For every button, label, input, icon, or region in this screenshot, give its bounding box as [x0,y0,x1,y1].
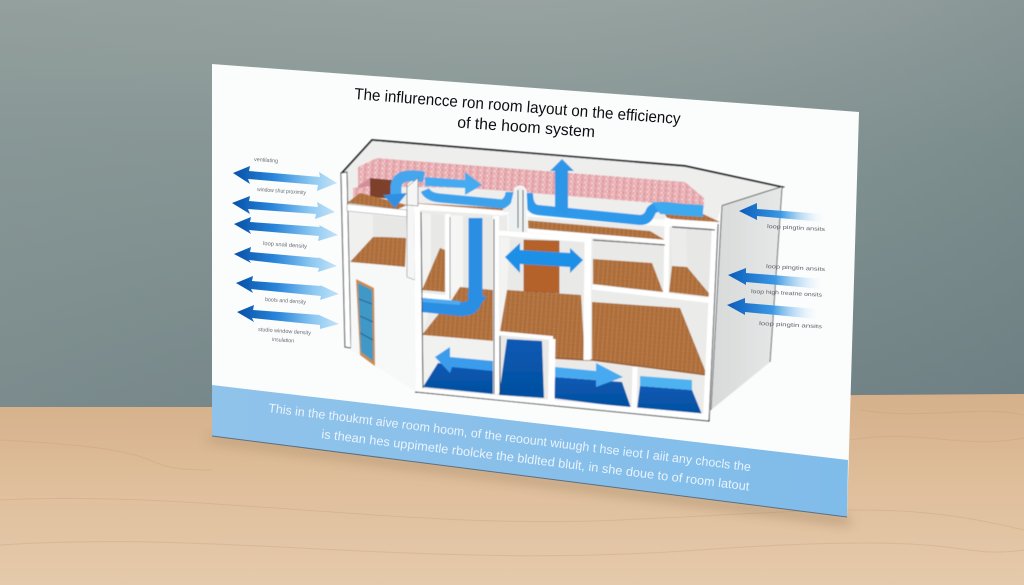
vertical duct with arrow [422,218,487,314]
card shadow [205,436,852,525]
room I lower [550,360,633,408]
left outer wall [341,172,351,348]
attic back wall [341,140,782,222]
room D blue corridor [499,333,551,400]
left arrow labels: studio window density [258,327,311,337]
room J lower [637,368,703,417]
dark wall outlines [415,212,718,421]
wall between left and middle [407,178,415,280]
room H large room [592,290,712,375]
background wall [0,0,1024,410]
right upper rooms [593,227,715,297]
middle frame interior fill [417,210,716,416]
room A/B divider [420,214,448,298]
exterior door [356,279,375,366]
left arrows: airflow out [232,166,339,329]
exterior white wall [350,262,416,392]
building cutaway [341,140,782,421]
left arrow labels: insulation [272,337,294,345]
right arrow labels: loop high treatne onsits [751,289,822,299]
left arrow labels: loop snail density [263,241,307,250]
floor edge shading [552,358,707,375]
left attic floor wood [347,193,407,209]
lower attic duct [425,190,510,204]
left arrow labels: window shut proximity [256,187,306,196]
vertical upward arrow [550,159,574,214]
card [212,64,859,517]
wooden door [524,240,559,293]
attic ducts [383,159,703,233]
roof outline [341,140,782,206]
middle and right attic floor wood [414,203,720,240]
card bottom edge [212,436,847,517]
right arrow labels: loop pingtin ansits [766,264,825,273]
right arrows: airflow in [727,203,823,319]
left attic divider [407,178,418,206]
room B [420,215,495,341]
right arrow labels [751,224,825,330]
right arrow labels: loop pingtin ansits [759,321,822,330]
left arrow labels: boots and density [265,297,306,306]
curved duct with down arrow [396,176,424,196]
footer text: is thean hes uppimetle rbolcke the bldlted blult, in she doue to of room latout [321,427,751,494]
left arrow labels [254,157,311,345]
footer text: This in the thoukmt aive room hoom, of the reoount wiuugh t hse ieot I aiit any chocls the [268,401,752,474]
room E with door [499,237,587,360]
left room [349,212,407,267]
horizontal attic arrow [425,172,482,195]
room C lower left [423,335,493,394]
right exterior side wall [711,187,782,410]
room A [420,213,445,292]
title: of the hoom system [457,115,596,141]
double-headed room arrow [505,243,583,273]
footer band [212,385,848,517]
title: The influrencce ron room layout on the efficiency [354,86,681,128]
right arrow labels: loop pingtin ansits [767,224,825,233]
service risers [508,186,528,233]
white structural walls [414,206,716,418]
insulation layer [353,158,704,207]
left arrow labels: ventilating [254,157,278,165]
wooden table [0,394,1024,585]
left attic beam [347,204,407,217]
